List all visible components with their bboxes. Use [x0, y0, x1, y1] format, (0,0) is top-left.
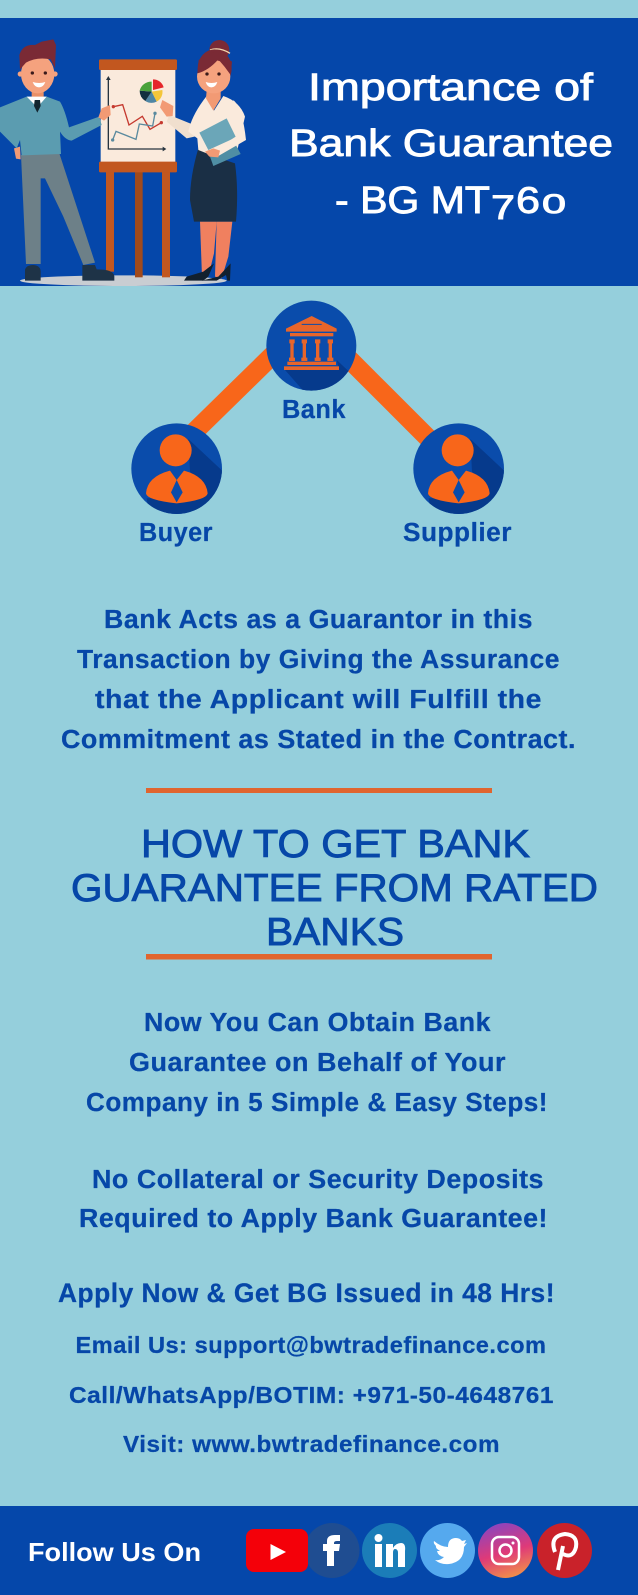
text block: five simple steps: Now You Can Obtain Bank [144, 1009, 491, 1037]
icon: supplier [413, 423, 507, 518]
text block: bank as guarantor: Commitment as Stated in the Contract. [61, 726, 576, 754]
header panel [0, 18, 638, 286]
title [289, 67, 613, 227]
icon: bank building [266, 300, 356, 391]
icon: buyer [131, 423, 225, 518]
title: Importance of [308, 67, 594, 109]
title: Bank Guarantee [289, 123, 613, 165]
contact details: Email Us: support@bwtradefinance.com [76, 1332, 546, 1358]
text block: five simple steps: Guarantee on Behalf of Your [129, 1049, 506, 1077]
diagram: bank, buyer and supplier [131, 301, 512, 547]
heading: how to get bank guarantee [71, 823, 598, 954]
icon: twitter [420, 1523, 475, 1578]
heading: how to get bank guarantee: GUARANTEE FROM RATED [71, 867, 598, 910]
icon: facebook [304, 1523, 360, 1578]
text block: bank as guarantor: that the Applicant will Fulfill the [95, 686, 542, 714]
text block: no collateral: No Collateral or Security Deposits [92, 1166, 544, 1194]
text block: bank as guarantor: Transaction by Giving the Assurance [77, 646, 560, 674]
contact details [69, 1332, 554, 1457]
connector: bank to supplier [340, 350, 436, 446]
text block: apply now: Apply Now & Get BG Issued in 48 Hrs! [58, 1278, 555, 1308]
footer label: Follow Us On [28, 1537, 201, 1567]
text block: no collateral: Required to Apply Bank Guarantee! [79, 1205, 548, 1233]
heading: how to get bank guarantee: BANKS [266, 911, 404, 954]
icon: pinterest [537, 1523, 592, 1578]
label: Supplier: Supplier [403, 519, 512, 547]
text block: bank as guarantor [61, 606, 576, 754]
text block: bank as guarantor: Bank Acts as a Guarantor in this [104, 606, 533, 634]
icon: instagram [478, 1523, 533, 1578]
text block: no collateral [79, 1166, 548, 1233]
label: Buyer: Buyer [139, 519, 213, 547]
title: 6 [516, 180, 540, 221]
title: - BG MT [335, 180, 490, 222]
text block: five simple steps: Company in 5 Simple & Easy Steps! [86, 1089, 548, 1117]
title: 0 [542, 189, 566, 219]
label: Bank: Bank [282, 396, 346, 424]
contact details: Call/WhatsApp/BOTIM: +971-50-4648761 [69, 1382, 554, 1408]
title: 7 [491, 189, 515, 227]
contact details: Visit: www.bwtradefinance.com [123, 1431, 500, 1457]
text block: five simple steps [86, 1009, 548, 1117]
illustration: presenters at flip chart [0, 39, 246, 286]
heading: how to get bank guarantee: HOW TO GET BANK [141, 823, 530, 866]
connector: buyer to bank [190, 343, 285, 436]
icon: linkedin [362, 1523, 417, 1578]
icon: youtube [246, 1529, 308, 1572]
footer panel [0, 1506, 638, 1595]
